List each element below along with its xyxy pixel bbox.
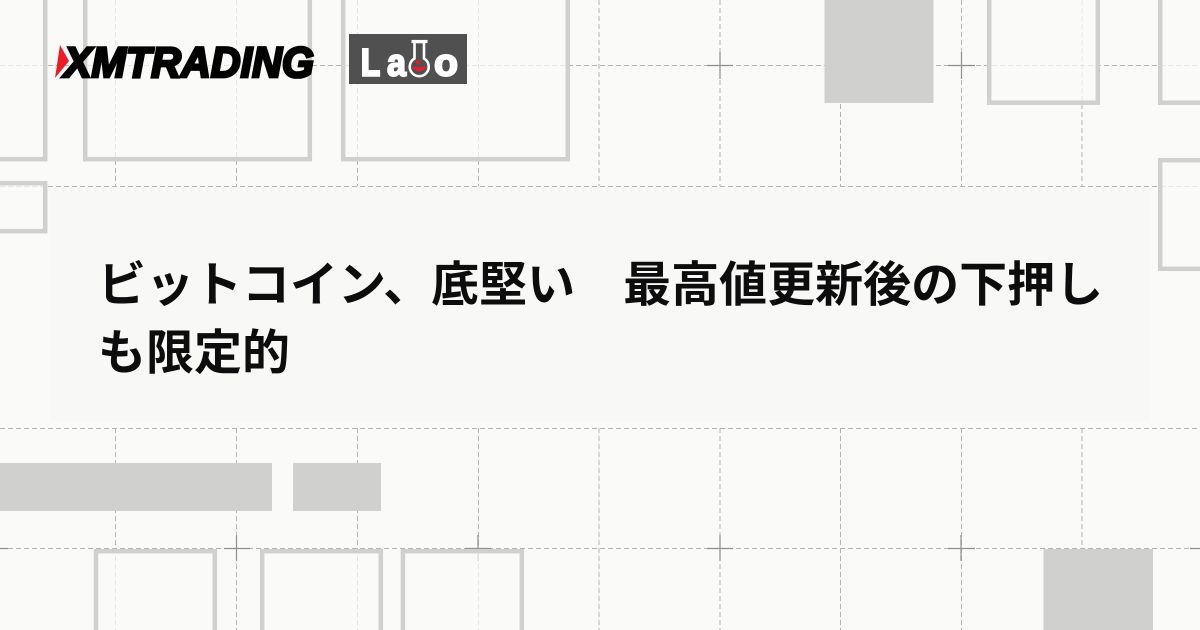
logo: XMTRADING: XMTRADING (62, 39, 314, 87)
panel: title background (50, 187, 1150, 421)
title: ビットコイン、底堅い 最高値更新後の下押しも限定的 (98, 259, 1103, 380)
logo: Lab (349, 34, 467, 84)
logo: Lab: o (434, 42, 458, 84)
logo: Lab: a (387, 42, 407, 84)
icon: flask (410, 42, 429, 76)
logo: Lab: L (361, 42, 380, 84)
